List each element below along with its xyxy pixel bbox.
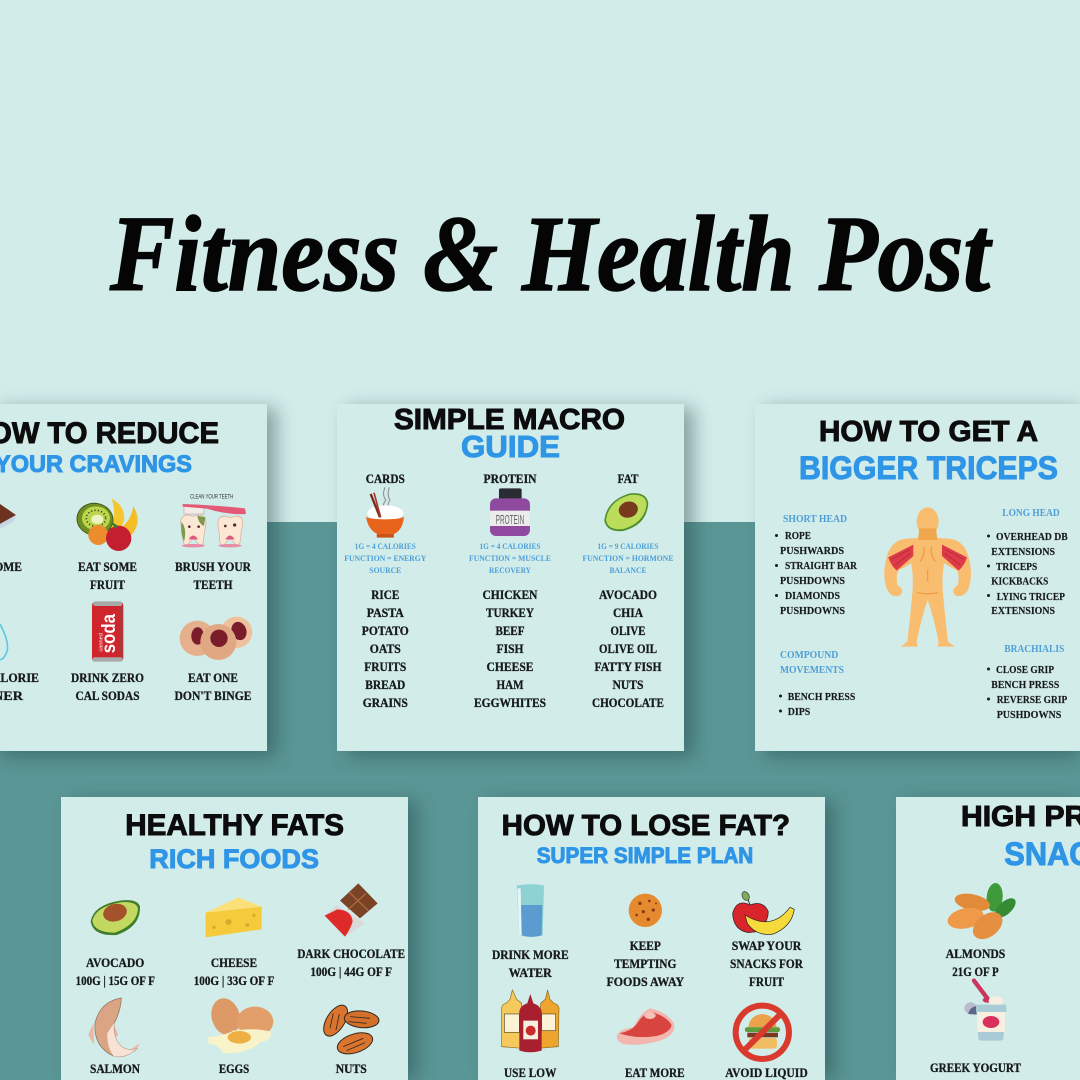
label: keep tempting foods away: FOODS AWAY: [606, 974, 685, 989]
panel: how to reduce your cravings: [0, 404, 277, 757]
compound movements list: DIPS: [788, 707, 810, 718]
label: drink zero cal sodas: [71, 670, 144, 703]
food list: fat: OLIVE: [610, 623, 646, 638]
label: almonds: ALMONDS: [946, 946, 1005, 961]
macro info: protein: FUNCTION = MUSCLE: [469, 553, 551, 563]
food list: protein: TURKEY: [486, 605, 535, 620]
heading: how to get a: HOW TO GET A: [819, 416, 1038, 448]
subheading: your cravings: YOUR CRAVINGS: [0, 451, 192, 478]
label: brush your teeth: TEETH: [194, 577, 232, 592]
heading: simple macro: SIMPLE MACRO: [394, 404, 625, 436]
label: eat more: EAT MORE: [625, 1065, 685, 1080]
label: keep tempting foods away: [606, 938, 685, 989]
panel: high protein snacks: [896, 797, 1080, 1080]
macro info: carbs: [344, 541, 427, 575]
macro info: protein: [469, 541, 551, 575]
food list: protein: EGGWHITES: [474, 695, 546, 710]
panel: healthy fats rich foods: [61, 797, 418, 1080]
label: drink more water: [492, 947, 569, 980]
icon: cookie: [629, 894, 662, 927]
icon: avocado: [91, 900, 140, 935]
food list: protein: CHICKEN: [482, 587, 538, 602]
label: cheese: CHEESE: [211, 955, 257, 970]
brachialis list: CLOSE GRIP: [996, 665, 1055, 676]
food list: protein: [474, 587, 546, 710]
column heads: FAT: [618, 471, 639, 486]
label: avocado: AVOCADO: [86, 955, 144, 970]
macro info: fat: FUNCTION = HORMONE: [582, 553, 674, 563]
label: eat some fruit: FRUIT: [90, 577, 125, 592]
short head list: [775, 514, 857, 617]
long head list: LONG HEAD: [1002, 508, 1060, 519]
icon: rice bowl: [366, 487, 404, 538]
food list: carbs: FRUITS: [364, 659, 406, 674]
long head list: LYING TRICEP: [997, 592, 1066, 603]
subheading: super simple plan: SUPER SIMPLE PLAN: [537, 843, 753, 868]
panel: simple macro guide: [337, 404, 694, 757]
icon: soda can: canned: [98, 633, 104, 652]
food list: carbs: PASTA: [367, 605, 404, 620]
label: greek yogurt: GREEK YOGURT: [930, 1060, 1021, 1075]
food list: fat: AVOCADO: [599, 587, 657, 602]
compound movements list: COMPOUND: [780, 650, 839, 661]
icon: teeth with toothbrush: [181, 493, 246, 547]
brachialis list: PUSHDOWNS: [997, 710, 1061, 721]
icon: water outline: [0, 624, 8, 660]
icon: cookies: [180, 617, 252, 660]
long head list: EXTENSIONS: [991, 547, 1055, 558]
label: dark chocolate: [297, 946, 405, 979]
icon: soda can: soda: [99, 614, 120, 653]
compound movements list: MOVEMENTS: [780, 665, 844, 676]
macro info: protein: RECOVERY: [489, 565, 532, 575]
macro info: fat: BALANCE: [610, 565, 647, 575]
label: almonds: [946, 946, 1005, 979]
icon: protein jar: [490, 488, 530, 536]
label: keep tempting foods away: KEEP: [630, 938, 661, 953]
label: dark chocolate: DARK CHOCOLATE: [297, 946, 405, 961]
short head list: ROPE: [785, 531, 811, 542]
food list: fat: [592, 587, 664, 710]
label: brush your teeth: BRUSH YOUR: [175, 559, 252, 574]
label: use low: USE LOW: [504, 1065, 556, 1080]
icon: soda can: [92, 601, 123, 662]
label: avocado: 100G | 15G OF F: [76, 973, 155, 988]
subheading: bigger triceps: BIGGER TRICEPS: [799, 450, 1058, 486]
food list: fat: CHIA: [613, 605, 644, 620]
brachialis list: BENCH PRESS: [991, 680, 1059, 691]
label: keep tempting foods away: TEMPTING: [614, 956, 676, 971]
long head list: TRICEPS: [996, 562, 1037, 573]
food list: fat: CHOCOLATE: [592, 695, 664, 710]
food list: carbs: BREAD: [365, 677, 405, 692]
label: avoid liquid: AVOID LIQUID: [725, 1065, 808, 1080]
column heads: PROTEIN: [484, 471, 537, 486]
label: avocado: [76, 955, 155, 988]
label: swap your snacks for fruit: SWAP YOUR: [732, 938, 802, 953]
label: salmon: SALMON: [90, 1061, 141, 1076]
food list: fat: NUTS: [612, 677, 644, 692]
label: cheese: [194, 955, 274, 988]
heading: how to lose fat: HOW TO LOSE FAT?: [502, 810, 790, 842]
icon: chocolate: [0, 504, 16, 529]
label: drink zero cal sodas: CAL SODAS: [76, 688, 140, 703]
label: eat one don't binge: [174, 670, 252, 703]
icon: protein jar: PROTEIN: [496, 513, 524, 527]
label: swap your snacks for fruit: FRUIT: [749, 974, 784, 989]
icon: salmon: [88, 998, 140, 1057]
short head list: PUSHDOWNS: [780, 576, 845, 587]
icon: eggs: [207, 995, 273, 1053]
icon: greek yogurt: [964, 981, 1006, 1041]
label: brush your teeth: [175, 559, 252, 592]
subheading: rich foods: RICH FOODS: [149, 844, 319, 874]
brachialis list: REVERSE GRIP: [997, 695, 1068, 706]
label: almonds: 21G OF P: [952, 964, 999, 979]
label: eggs: EGGS: [219, 1061, 249, 1076]
icon: glass of water: [517, 884, 544, 937]
food list: carbs: OATS: [370, 641, 401, 656]
long head list: OVERHEAD DB: [996, 532, 1068, 543]
icon: apple and banana: [733, 890, 794, 934]
heading: healthy fats: HEALTHY FATS: [125, 809, 344, 842]
title: Fitness & Health Post: [109, 195, 993, 314]
label: eat one don't binge: EAT ONE: [188, 670, 238, 685]
label: eat some fruit: EAT SOME: [78, 559, 137, 574]
icon: teeth with toothbrush: CLEAN YOUR TEETH: [190, 493, 234, 500]
label: nuts: NUTS: [336, 1061, 367, 1076]
food list: fat: FATTY FISH: [594, 659, 662, 674]
short head list: PUSHDOWNS: [780, 606, 845, 617]
label: drink more water: DRINK MORE: [492, 947, 569, 962]
food list: carbs: POTATO: [362, 623, 409, 638]
food list: fat: OLIVE OIL: [599, 641, 657, 656]
icon: cheese: [206, 897, 262, 937]
icon: condiment bottles: [502, 990, 559, 1052]
food list: protein: CHEESE: [486, 659, 534, 674]
macro info: carbs: 1G = 4 CALORIES: [355, 541, 416, 551]
macro info: carbs: SOURCE: [369, 565, 402, 575]
icon: steak: [617, 1008, 674, 1045]
label: swap your snacks for fruit: SNACKS FOR: [730, 956, 804, 971]
label: drink more water: WATER: [509, 965, 552, 980]
label: cheese: 100G | 33G OF F: [194, 973, 274, 988]
panel: how to lose fat: [478, 797, 835, 1080]
macro info: fat: 1G = 9 CALORIES: [598, 541, 659, 551]
icon: almonds with leaves: [946, 882, 1019, 945]
food list: carbs: [362, 587, 409, 710]
short head list: SHORT HEAD: [783, 514, 847, 525]
long head list: EXTENSIONS: [991, 606, 1055, 617]
label: low calorie dinner: [0, 670, 39, 703]
food list: carbs: GRAINS: [363, 695, 408, 710]
compound movements list: BENCH PRESS: [788, 692, 855, 703]
icon: no burger: [736, 1006, 789, 1059]
food list: protein: HAM: [496, 677, 524, 692]
label: eat some fruit: [78, 559, 137, 592]
short head list: DIAMONDS: [785, 591, 840, 602]
column heads: [366, 471, 639, 486]
label: drink zero cal sodas: DRINK ZERO: [71, 670, 144, 685]
long head list: KICKBACKS: [991, 576, 1048, 588]
subheading: guide: GUIDE: [461, 429, 560, 464]
label: swap your snacks for fruit: [730, 938, 804, 989]
icon: nuts: [319, 1001, 380, 1058]
label: eat one don't binge: DON'T BINGE: [174, 688, 252, 703]
icon: muscular body with triceps highlighted: [884, 507, 971, 647]
label: dark chocolate: 100G | 44G OF F: [310, 964, 392, 979]
long head list: [987, 508, 1068, 617]
macro info: protein: 1G = 4 CALORIES: [480, 541, 541, 551]
column heads: CARDS: [366, 471, 405, 486]
food list: protein: BEEF: [496, 623, 525, 638]
panel: bigger triceps: [755, 404, 1080, 757]
brachialis list: BRACHIALIS: [1004, 644, 1064, 655]
macro info: fat: [582, 541, 674, 575]
short head list: STRAIGHT BAR: [785, 561, 857, 572]
short head list: PUSHWARDS: [780, 546, 844, 557]
food list: protein: FISH: [496, 641, 524, 656]
brachialis list: [987, 644, 1068, 721]
icon: avocado: [604, 493, 648, 531]
compound movements list: [779, 650, 855, 718]
icon: dark chocolate: [325, 883, 378, 937]
icon: fruit: [74, 499, 138, 551]
food list: carbs: RICE: [371, 587, 399, 602]
macro info: carbs: FUNCTION = ENERGY: [344, 553, 427, 563]
